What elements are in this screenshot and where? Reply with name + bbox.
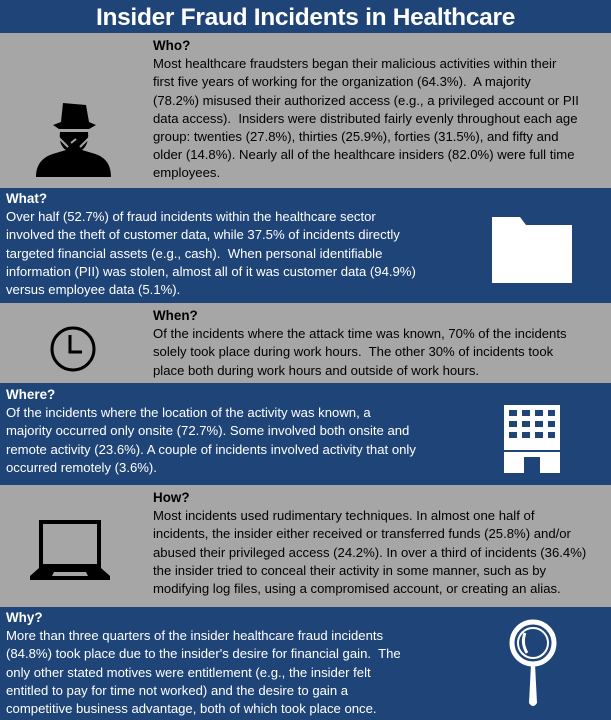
panel: when	[0, 305, 611, 381]
text: what: targeted financial assets (e.g., cash). When personal identifiable	[6, 246, 382, 261]
text: who: group: twenties (27.8%), thirties (25.9%), forties (31.5%), and fifty and	[153, 129, 559, 144]
text: why: competitive business advantage, both of which took place once.	[6, 701, 377, 716]
text: where	[6, 387, 416, 475]
icon: spy	[36, 103, 111, 177]
text: where: Of the incidents where the location of the activity was known, a	[6, 405, 371, 420]
text: how: modifying log files, using a compromised account, or creating an alias.	[153, 581, 561, 596]
text: why	[6, 610, 401, 716]
text: who: (78.2%) misused their authorized access (e.g., a privileged account or PII	[153, 93, 579, 108]
icon: folder	[492, 217, 572, 283]
text: who: Most healthcare fraudsters began their malicious activities within their	[153, 56, 556, 71]
text: who: first five years of working for the organization (64.3%). A majority	[153, 74, 531, 89]
text: where: Where?	[6, 387, 55, 402]
text: when: place both during work hours and outside of work hours.	[153, 363, 479, 378]
text: why: Why?	[6, 610, 43, 625]
text: who: data access). Insiders were distributed fairly evenly throughout each age	[153, 111, 578, 126]
text: why: only other stated motives were entitlement (e.g., the insider felt	[6, 665, 371, 680]
panel: why	[0, 607, 611, 720]
text: what: Over half (52.7%) of fraud incidents within the healthcare sector	[6, 209, 376, 224]
text: when: Of the incidents where the attack time was known, 70% of the incidents	[153, 326, 567, 341]
icon: magnifier	[510, 620, 556, 706]
text: how: incidents, the insider either received or transferred funds (25.8%) and/or	[153, 526, 571, 541]
text: when: solely took place during work hours. The other 30% of incidents took	[153, 344, 553, 359]
text: who: employees.	[153, 165, 220, 180]
panel: who	[0, 34, 611, 186]
text: why: entitled to pay for time not worked) and the desire to gain a	[6, 683, 348, 698]
text: how: abused their privileged access (24.2%). In over a third of incidents (36.4%)	[153, 545, 586, 560]
text: what: involved the theft of customer data, while 37.5% of incidents directly	[6, 227, 400, 242]
text: where: majority occurred only onsite (72.7%). Some involved both onsite and	[6, 423, 409, 438]
icon: laptop	[30, 520, 110, 580]
text: why: More than three quarters of the insider healthcare fraud incidents	[6, 628, 383, 643]
icon: building	[504, 405, 560, 473]
text: how: the insider tried to conceal their activity in some manner, such as by	[153, 563, 546, 578]
text: what	[6, 191, 416, 297]
text: where: remote activity (23.6%). A couple of incidents involved activity that only	[6, 442, 416, 457]
text: who: older (14.8%). Nearly all of the healthcare insiders (82.0%) were full time	[153, 147, 575, 162]
text: who: Who?	[153, 38, 190, 53]
text: what: information (PII) was stolen, almost all of it was customer data (94.9%)	[6, 264, 416, 279]
text: what: What?	[6, 191, 47, 206]
panel: where	[0, 383, 611, 485]
panel: how	[0, 487, 611, 605]
title: Insider Fraud Incidents in Healthcare	[96, 4, 515, 31]
icon: clock	[50, 326, 96, 372]
text: how	[153, 490, 586, 596]
text: who	[153, 38, 579, 180]
text: when: When?	[153, 308, 198, 323]
text: how: Most incidents used rudimentary techniques. In almost one half of	[153, 508, 534, 523]
title	[0, 0, 611, 33]
text: why: (84.8%) took place due to the insider's desire for financial gain. The	[6, 646, 401, 661]
text: how: How?	[153, 490, 190, 505]
text: what: versus employee data (5.1%).	[6, 282, 180, 297]
panel: what	[0, 188, 611, 303]
text: when	[153, 308, 567, 378]
text: where: occurred remotely (3.6%).	[6, 460, 157, 475]
